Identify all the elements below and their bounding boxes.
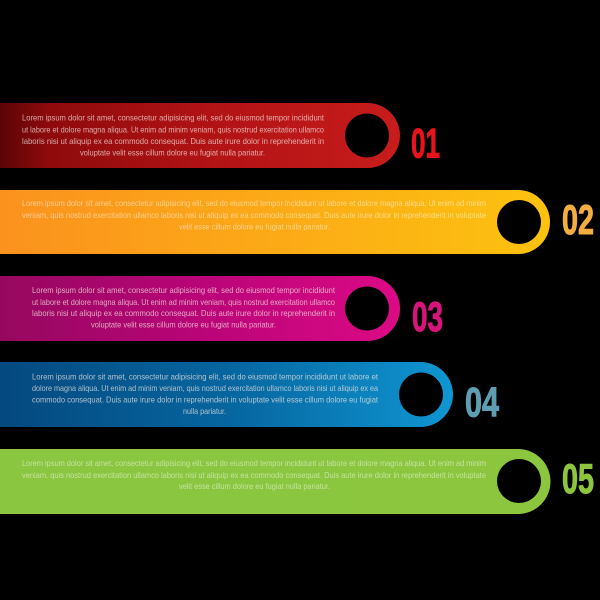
panel: step 02 [0,190,594,254]
text block 02: Lorem ipsum dolor sit amet, consectetur adipisicing elit, sed do eiusmod tempor incididunt ut labore et dolore magna aliqua. Ut enim ad minim [22,199,486,208]
red bar [0,103,400,168]
text block 05: Lorem ipsum dolor sit amet, consectetur adipisicing elit, sed do eiusmod tempor incididunt ut labore et dolore magna aliqua. Ut enim ad minim [22,459,486,468]
panel: step 05 [0,449,594,514]
text block 05: velit esse cillum dolore eu fugiat nulla pariatur. [179,482,330,491]
icon: circle hole 05 [497,459,541,503]
text block 01 [22,114,325,158]
text block 01: voluptate velit esse cillum dolore eu fugiat nulla pariatur. [80,148,265,158]
text block 01: laboris nisi ut aliquip ex ea commodo consequat. Duis aute irure dolor in reprehenderit in [22,137,324,146]
blue bar [0,362,453,427]
text block 04: nulla pariatur. [183,407,226,416]
text block 02: veniam, quis nostrud exercitation ullamco laboris nisi ut aliquip ex ea commodo consequat. Duis aute irure dolor in reprehenderit in voluptate [22,211,486,220]
icon: circle hole 03 [345,286,389,330]
text block 05: veniam, quis nostrud exercitation ullamco laboris nisi ut aliquip ex ea commodo consequat. Duis aute irure dolor in reprehenderit in voluptate [22,471,486,480]
text block 04: dolore magna aliqua. Ut enim ad minim veniam, quis nostrud exercitation ullamco laboris nisi ut aliquip ex ea [32,384,378,393]
orange bar [0,190,550,254]
number 04: 04 [465,378,499,426]
magenta bar [0,276,400,341]
number 03: 03 [412,293,443,340]
icon: circle hole 04 [399,372,443,416]
text block 04: commodo consequat. Duis aute irure dolor in reprehenderit in voluptate velit esse cillum dolore eu fugiat [32,396,379,404]
icon: circle hole 02 [497,200,541,244]
text block 03 [32,286,336,330]
text block 01: Lorem ipsum dolor sit amet, consectetur adipisicing elit, sed do eiusmod tempor incididunt [22,114,325,122]
text block 03: voluptate velit esse cillum dolore eu fugiat nulla pariatur. [91,320,276,330]
icon: circle hole 01 [345,114,389,158]
text block 02 [22,199,486,232]
text block 04 [32,373,379,416]
panel: step 04 [0,362,499,427]
text block 01: ut labore et dolore magna aliqua. Ut enim ad minim veniam, quis nostrud exercitation ullamco [22,126,324,134]
number 01: 01 [411,120,440,166]
text block 05 [22,459,486,491]
text block 03: Lorem ipsum dolor sit amet, consectetur adipisicing elit, sed do eiusmod tempor incididunt [32,286,336,295]
text block 03: laboris nisi ut aliquip ex ea commodo consequat. Duis aute irure dolor in reprehenderit in [32,309,335,318]
text block 02: velit esse cillum dolore eu fugiat nulla pariatur. [179,223,330,232]
text block 03: ut labore et dolore magna aliqua. Ut enim ad minim veniam, quis nostrud exercitation ullamco [32,298,335,307]
text block 04: Lorem ipsum dolor sit amet, consectetur adipisicing elit, sed do eiusmod tempor incididunt ut labore et [32,373,379,382]
panel: step 03 [0,276,443,341]
green bar [0,449,550,514]
panel: step 01 [0,103,440,168]
